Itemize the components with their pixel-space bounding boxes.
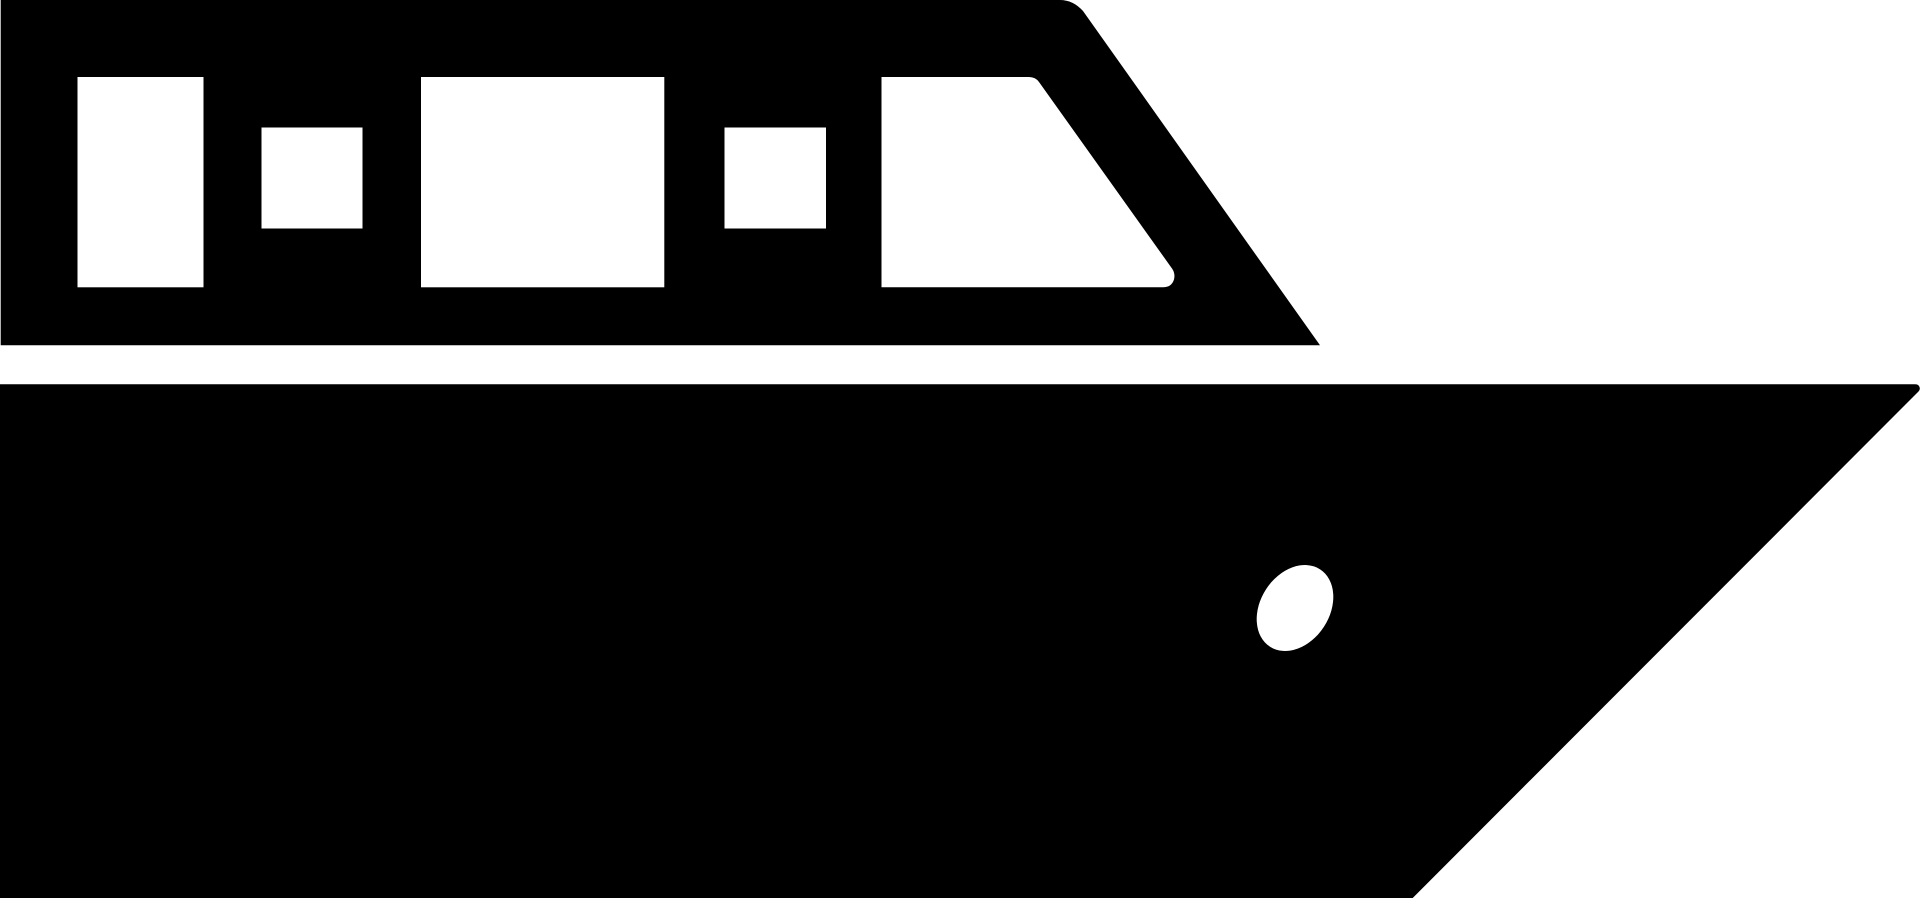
cabin window 2 xyxy=(262,128,362,228)
boat hull xyxy=(0,384,1920,898)
cabin window 1 xyxy=(78,77,204,287)
boat cabin xyxy=(1,0,1320,345)
porthole xyxy=(1241,551,1349,665)
cabin window 3 xyxy=(421,77,664,287)
cabin window 4 xyxy=(724,128,826,228)
cockpit windshield xyxy=(882,77,1174,287)
